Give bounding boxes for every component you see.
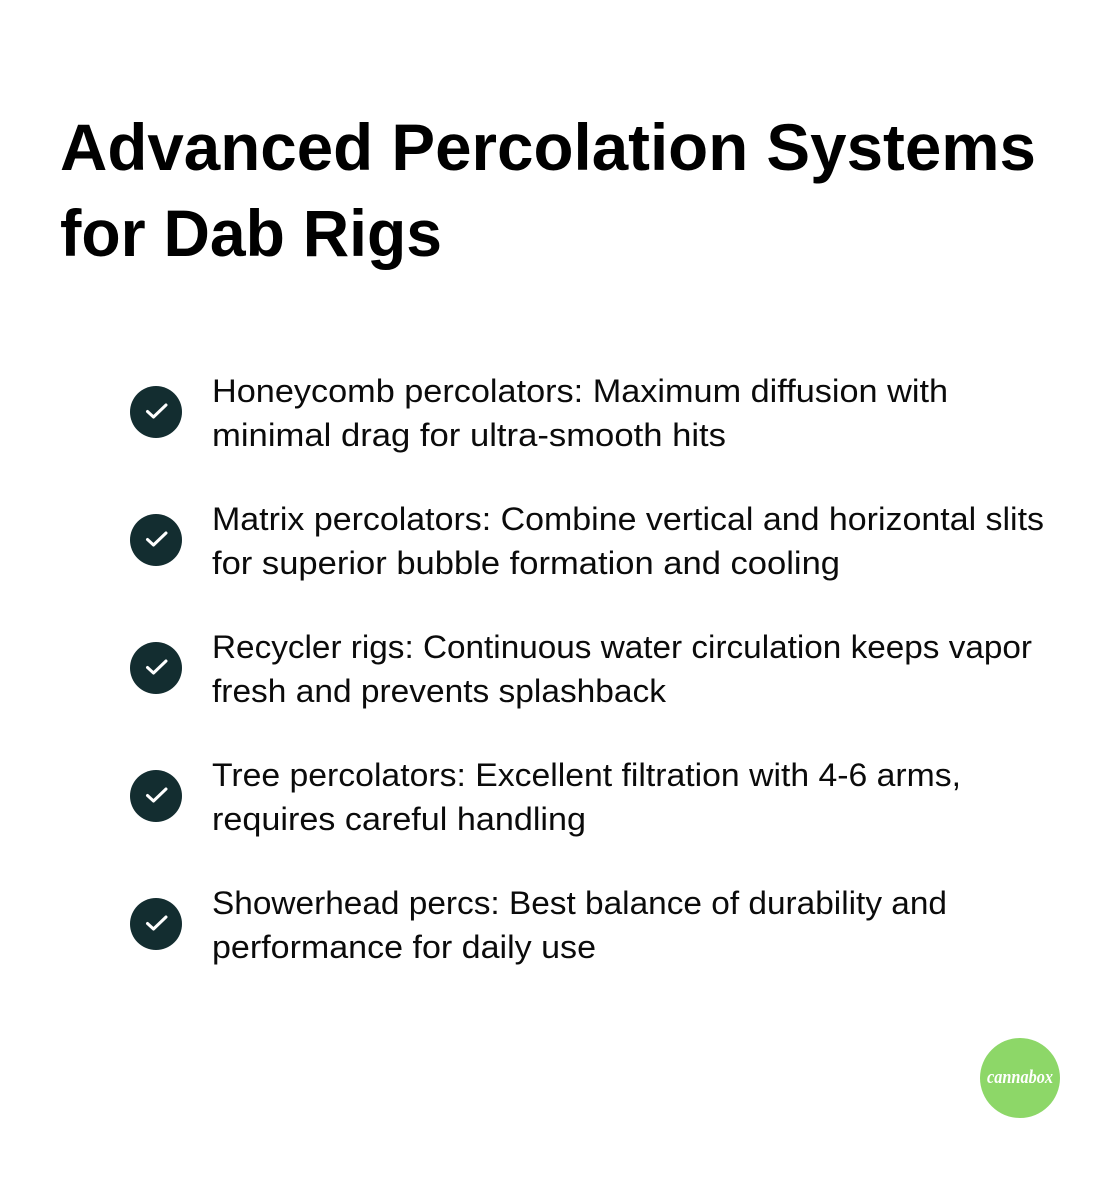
text: honeycomb percolators: minimal drag for ultra-smooth hits <box>212 417 726 453</box>
icon: check badge <box>130 770 182 822</box>
icon: check badge <box>130 514 182 566</box>
text: honeycomb percolators <box>212 373 948 453</box>
item: showerhead percs <box>130 885 947 965</box>
text: matrix percolators: Matrix percolators: Combine vertical and horizontal slits <box>212 501 1044 537</box>
text: matrix percolators: for superior bubble formation and cooling <box>212 545 840 581</box>
text: matrix percolators <box>212 501 1044 581</box>
text: showerhead percs: Showerhead percs: Best balance of durability and <box>212 885 947 921</box>
text: honeycomb percolators: Honeycomb percolators: Maximum diffusion with <box>212 373 948 409</box>
text: showerhead percs <box>212 885 947 965</box>
icon: check badge <box>130 386 182 438</box>
text: tree percolators: requires careful handling <box>212 801 586 837</box>
logo: cannabox badge <box>980 1038 1060 1118</box>
item: honeycomb percolators <box>130 373 948 453</box>
text: showerhead percs: performance for daily use <box>212 929 596 965</box>
title: for Dab Rigs <box>60 196 442 270</box>
item: tree percolators <box>130 757 961 837</box>
text: tree percolators: Tree percolators: Excellent filtration with 4-6 arms, <box>212 757 961 793</box>
item: recycler rigs <box>130 629 1032 709</box>
list: percolation systems <box>130 373 1044 965</box>
text: recycler rigs <box>212 629 1032 709</box>
item: matrix percolators <box>130 501 1044 581</box>
title <box>60 110 1036 270</box>
text: recycler rigs: fresh and prevents splashback <box>212 673 667 709</box>
text: tree percolators <box>212 757 961 837</box>
logo: cannabox badge: cannabox <box>987 1067 1053 1088</box>
title: Advanced Percolation Systems <box>60 110 1036 184</box>
icon: check badge <box>130 898 182 950</box>
text: recycler rigs: Recycler rigs: Continuous water circulation keeps vapor <box>212 629 1032 665</box>
icon: check badge <box>130 642 182 694</box>
